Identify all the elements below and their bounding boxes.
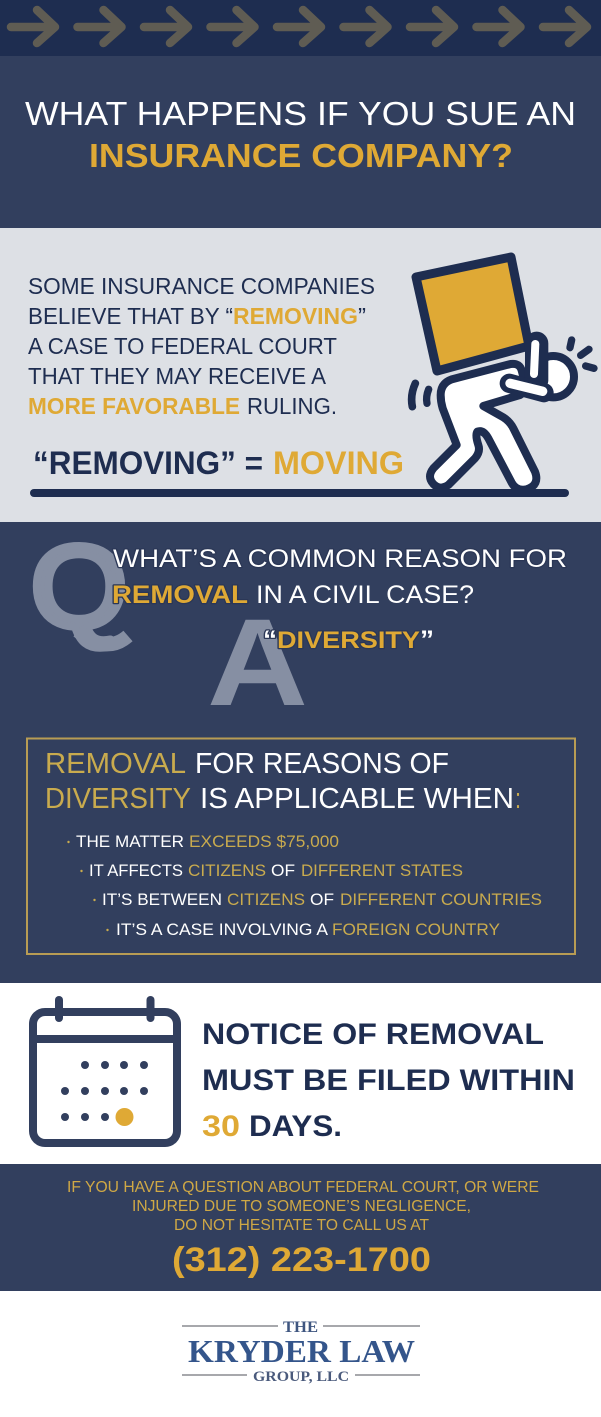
condition 3: DIFFERENT COUNTRIES xyxy=(340,890,542,909)
explanation text xyxy=(28,273,375,419)
condition 2: OF xyxy=(271,861,295,880)
icon: person carrying box xyxy=(412,257,594,490)
condition 2 xyxy=(80,861,463,880)
explanation text: A CASE TO FEDERAL COURT xyxy=(28,333,337,359)
removing equals moving: MOVING xyxy=(273,445,404,481)
answer text: ” xyxy=(420,626,434,654)
arrows row xyxy=(11,10,587,43)
question text: IN A CIVIL CASE? xyxy=(256,581,474,609)
question text: REMOVAL xyxy=(112,581,248,609)
ground line xyxy=(34,489,565,497)
head xyxy=(533,356,574,397)
logo: The Kryder Law Group xyxy=(0,1291,601,1417)
icon: calendar xyxy=(33,1000,177,1143)
condition 3: OF xyxy=(310,890,334,909)
logo: The Kryder Law Group: KRYDER LAW xyxy=(188,1333,415,1369)
condition 1 xyxy=(67,832,339,851)
answer text: “ xyxy=(263,626,277,654)
explanation text: SOME INSURANCE COMPANIES xyxy=(28,273,375,299)
notice text xyxy=(202,1018,575,1143)
callout heading: IS APPLICABLE WHEN xyxy=(200,783,514,815)
box xyxy=(416,257,529,371)
callout heading: FOR REASONS OF xyxy=(195,748,449,780)
call to action text: DO NOT HESITATE TO CALL US AT xyxy=(174,1217,430,1234)
call to action text: INJURED DUE TO SOMEONE’S NEGLIGENCE, xyxy=(132,1198,471,1215)
condition 3 xyxy=(93,890,542,909)
explanation text: REMOVING xyxy=(233,303,358,329)
callout heading: : xyxy=(515,783,521,815)
panel: notice of removal xyxy=(0,983,601,1164)
call to action text: IF YOU HAVE A QUESTION ABOUT FEDERAL COURT, OR WERE xyxy=(67,1179,539,1196)
motion marks xyxy=(412,340,594,407)
notice text: MUST BE FILED WITHIN xyxy=(202,1064,575,1097)
panel: call to action xyxy=(0,1164,601,1291)
title panel xyxy=(0,56,601,228)
callout heading: DIVERSITY xyxy=(45,783,191,815)
arm xyxy=(509,343,544,393)
arrow banner xyxy=(0,0,601,56)
condition 4: FOREIGN COUNTRY xyxy=(332,920,500,939)
condition 2: DIFFERENT STATES xyxy=(301,861,463,880)
question text xyxy=(112,545,567,609)
removing equals moving xyxy=(33,445,404,481)
explanation text: RULING. xyxy=(247,393,337,419)
condition 4 xyxy=(106,920,500,939)
condition 2: IT AFFECTS xyxy=(89,861,183,880)
condition 1: THE MATTER xyxy=(76,832,184,851)
explanation text: BELIEVE THAT BY “ xyxy=(28,303,233,329)
title line 2: INSURANCE COMPANY? xyxy=(89,137,513,174)
condition 1: EXCEEDS $75,000 xyxy=(189,832,339,851)
callout: diversity conditions xyxy=(27,738,575,954)
condition 3: IT’S BETWEEN xyxy=(102,890,222,909)
explanation text: MORE FAVORABLE xyxy=(28,393,240,419)
notice text: NOTICE OF REMOVAL xyxy=(202,1018,544,1051)
phone number: (312) 223-1700 xyxy=(172,1241,431,1279)
panel: removing explanation xyxy=(0,228,601,522)
condition 2: CITIZENS xyxy=(188,861,266,880)
condition 4: IT’S A CASE INVOLVING A xyxy=(116,920,329,939)
condition 3: CITIZENS xyxy=(227,890,305,909)
logo: The Kryder Law Group: GROUP, LLC xyxy=(253,1369,349,1385)
question text: WHAT’S A COMMON REASON FOR xyxy=(113,545,567,573)
explanation text: ” xyxy=(358,303,366,329)
answer text: DIVERSITY xyxy=(277,627,420,654)
panel: question and answer xyxy=(0,522,601,983)
explanation text: THAT THEY MAY RECEIVE A xyxy=(28,363,326,389)
call to action text xyxy=(67,1179,539,1234)
letter Q: Q xyxy=(31,523,127,651)
callout heading xyxy=(45,748,521,815)
notice text: 30 xyxy=(202,1110,240,1143)
removing equals moving: “REMOVING” = xyxy=(33,445,263,481)
title line 1: WHAT HAPPENS IF YOU SUE AN xyxy=(25,95,576,132)
logo: The Kryder Law Group: THE xyxy=(283,1319,318,1336)
callout heading: REMOVAL xyxy=(45,748,186,780)
letter A: A xyxy=(207,594,308,732)
body and legs xyxy=(430,364,536,490)
notice text: DAYS. xyxy=(249,1110,342,1143)
